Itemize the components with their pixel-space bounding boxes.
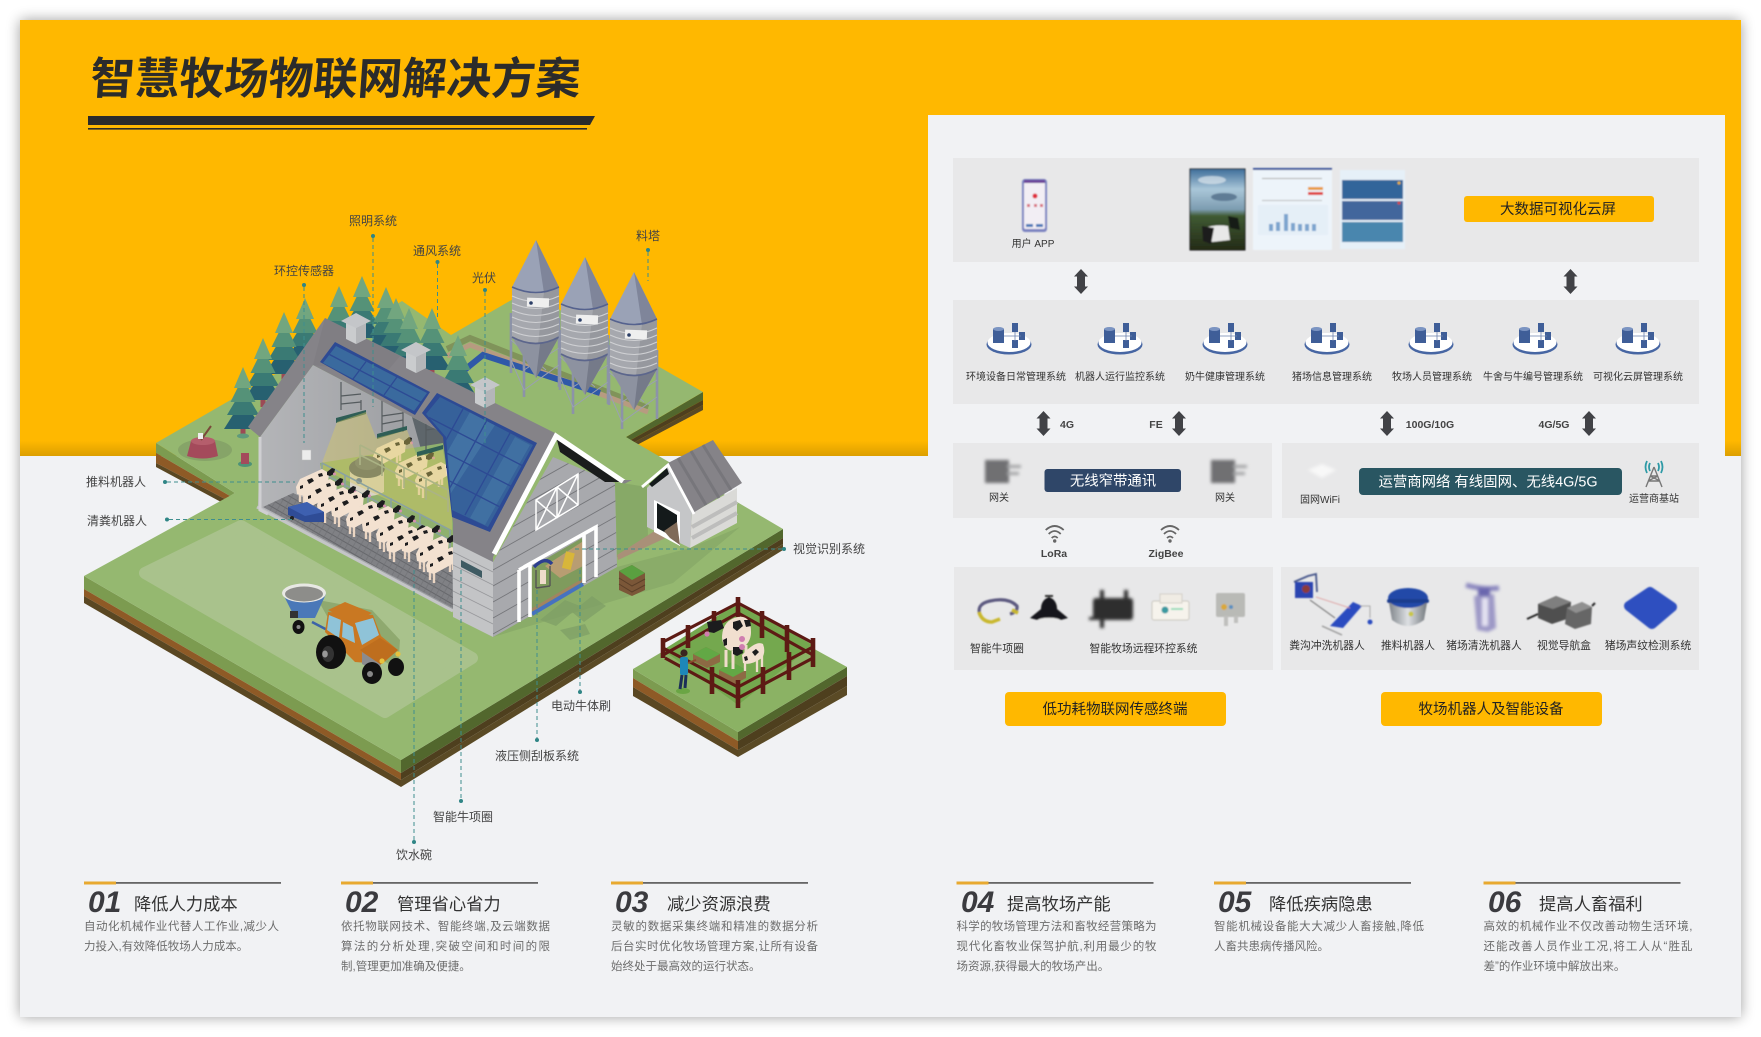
front fence	[663, 638, 813, 708]
loft window	[536, 474, 578, 530]
interior walls	[258, 365, 453, 610]
callout: 电动牛体刷: 电动牛体刷	[551, 698, 611, 713]
shed	[642, 440, 742, 548]
benefit 06: 还能改善人员作业工况,将工人从“胜乱	[1484, 939, 1693, 953]
icon: base station	[1646, 461, 1662, 487]
link: 100G/10G	[1380, 411, 1454, 436]
left wall trim	[260, 437, 268, 514]
label: user app: 用户 APP	[1012, 237, 1055, 250]
light field	[145, 526, 472, 712]
benefit 02: 算法的分析处理,突破空间和时间的限	[341, 939, 550, 953]
house ground shadow	[493, 527, 740, 637]
icon: gateway left	[985, 460, 1021, 483]
ground shadow pattern	[540, 596, 606, 640]
side wall details	[453, 552, 493, 624]
front wall	[493, 457, 617, 637]
roof	[248, 318, 555, 563]
callout: 光伏: 光伏	[472, 271, 496, 285]
benefit 04	[956, 882, 1157, 973]
protocol: LoRa	[1041, 526, 1067, 560]
main ground top	[84, 291, 783, 760]
lamp fixtures	[336, 382, 443, 457]
icon: lamp	[1030, 595, 1068, 622]
callout: 清粪机器人	[87, 514, 292, 528]
benefit 05: 降低疾病隐患	[1269, 894, 1373, 914]
button: big data screen	[1464, 196, 1654, 222]
link: FE: FE	[1149, 419, 1163, 431]
screen: pasture camera	[1190, 169, 1245, 250]
button: big data screen: 大数据可视化云屏	[1500, 201, 1616, 218]
gable trim	[494, 436, 632, 554]
label: vision box: 视觉导航盒	[1537, 638, 1591, 652]
solar panel 2	[422, 393, 537, 532]
feed crates	[693, 647, 746, 685]
farmer	[676, 649, 696, 694]
tree stumps	[178, 426, 252, 467]
callout: 环控传感器	[274, 263, 334, 443]
callout: 料塔: 料塔	[636, 229, 660, 243]
benefit 05: 05	[1218, 886, 1253, 919]
callout: 饮水碗: 饮水碗	[396, 847, 432, 862]
dairy cows	[296, 468, 466, 583]
benefit 06	[1484, 882, 1693, 973]
screen: monitoring	[1340, 170, 1405, 249]
main ground front faces	[84, 529, 783, 787]
cleaning robot	[288, 502, 324, 522]
badge: carrier network	[1359, 468, 1622, 495]
system: barn and cattle ID	[1483, 323, 1583, 383]
benefit 04: 科学的牧场管理方法和畜牧经营策略为	[956, 919, 1156, 933]
benefit 02: 制,管理更加准确及便捷。	[341, 959, 471, 973]
callout: 智能牛项圈	[433, 570, 493, 824]
system: barn and cattle ID: 牛舍与牛编号管理系统	[1483, 370, 1583, 383]
system: dairy health: 奶牛健康管理系统	[1185, 370, 1265, 383]
callout: 清粪机器人: 清粪机器人	[87, 514, 147, 528]
benefit 03: 减少资源浪费	[667, 894, 771, 914]
callout: 饮水碗	[396, 570, 432, 862]
benefit 02: 依托物联网技术、智能终端,及云端数据	[341, 919, 550, 933]
interior grass	[320, 443, 453, 560]
layer: application	[953, 158, 1699, 262]
benefit 02: 管理省心省力	[397, 894, 501, 914]
icon: controller	[1089, 590, 1133, 628]
icon: smart collar	[979, 600, 1018, 622]
callout: 通风系统: 通风系统	[413, 244, 461, 258]
benefit 06: 高效的机械作业不仅改善动物生活环境,	[1484, 919, 1692, 933]
environment sensor	[302, 450, 311, 460]
icon: vision box	[1527, 596, 1595, 629]
benefit 01: 01	[88, 886, 121, 919]
arrow	[1074, 269, 1088, 294]
label: remote env control: 智能牧场远程环控系统	[1090, 641, 1198, 655]
benefit 02	[341, 882, 550, 973]
label: sound detection: 猪场声纹检测系统	[1605, 638, 1691, 652]
system: staff: 牧场人员管理系统	[1392, 370, 1472, 383]
barn	[248, 313, 648, 637]
system: robot monitoring	[1075, 323, 1165, 383]
feed crate	[619, 565, 645, 596]
paddock island	[633, 597, 847, 757]
link: 4G: 4G	[1060, 419, 1074, 431]
icon: cleaning robot	[1466, 585, 1499, 632]
layer: sensor terminals	[954, 567, 1273, 670]
badge: narrowband: 无线窄带通讯	[1070, 472, 1156, 490]
system: environment	[966, 323, 1066, 383]
solar panel 1	[320, 342, 430, 415]
callout: 液压侧刮板系统: 液压侧刮板系统	[495, 748, 579, 763]
calf	[733, 643, 764, 672]
barn door	[519, 527, 596, 622]
callout: 环控传感器: 环控传感器	[274, 263, 334, 278]
ledge side left	[156, 443, 235, 502]
benefit 04: 提高牧场产能	[1007, 894, 1111, 914]
system: cloud screen	[1593, 323, 1683, 383]
button: sensor terminals	[1005, 692, 1226, 726]
benefit 06: 06	[1488, 886, 1522, 919]
button: sensor terminals: 低功耗物联网传感终端	[1042, 701, 1188, 718]
button: robots: 牧场机器人及智能设备	[1418, 701, 1564, 718]
benefit 04: 现代化畜牧业保驾护航,利用最少的牧	[956, 939, 1157, 953]
benefit 04: 场资源,获得最大的牧场产出。	[956, 959, 1109, 973]
callout: 电动牛体刷	[551, 570, 611, 713]
callout: 推料机器人	[86, 475, 295, 489]
layer: management systems	[953, 300, 1699, 404]
floor edge	[257, 507, 453, 611]
callout: 通风系统	[413, 244, 461, 318]
badge: carrier network: 运营商网络 有线固网、无线4G/5G	[1378, 474, 1598, 490]
label: fixed wifi: 固网WiFi	[1300, 494, 1340, 506]
protocol: LoRa: LoRa	[1041, 548, 1067, 560]
callout: 视觉识别系统	[575, 541, 865, 556]
silo platform side	[626, 392, 703, 447]
callout: 液压侧刮板系统	[495, 590, 579, 763]
benefit 05: 人畜共患病传播风险。	[1214, 939, 1329, 953]
panel background	[928, 115, 1725, 460]
label: flushing robot: 粪沟冲洗机器人	[1289, 638, 1365, 652]
benefit 04: 04	[961, 886, 995, 919]
icon: fixed wifi	[1308, 464, 1336, 478]
benefit 03: 始终处于最高效的运行状态。	[611, 959, 760, 973]
link: FE	[1149, 411, 1186, 436]
screen: dashboard	[1253, 168, 1332, 250]
system: farm info: 猪场信息管理系统	[1292, 370, 1372, 383]
back row cows	[373, 437, 455, 498]
benefit 03	[611, 882, 818, 973]
light cones	[320, 412, 452, 530]
icon: gray sensor	[1216, 593, 1245, 626]
benefit 06: 差”的作业环境中解放出来。	[1484, 959, 1625, 973]
callout: 光伏	[472, 271, 496, 446]
system: staff	[1392, 323, 1472, 383]
label: gateway: 网关	[989, 491, 1009, 504]
benefit 01: 力投入,有效降低牧场人力成本。	[84, 939, 248, 953]
front fence	[322, 463, 450, 552]
button: robots	[1381, 692, 1602, 726]
callout: 照明系统	[349, 214, 397, 407]
callout: 智能牛项圈: 智能牛项圈	[433, 809, 493, 824]
icon: user app phone	[1022, 179, 1047, 232]
feed robot	[349, 456, 385, 496]
water channel	[447, 338, 648, 412]
protocol: ZigBee: ZigBee	[1148, 548, 1184, 560]
large cow	[704, 617, 751, 669]
benefit 01: 自动化机械作业代替人工作业,减少人	[84, 919, 280, 933]
callout: 推料机器人: 推料机器人	[86, 475, 146, 489]
benefit 03: 后台实时优化牧场管理方案,让所有设备	[611, 939, 818, 953]
icon: sound detector	[1629, 592, 1672, 624]
yellow header band	[20, 20, 1741, 456]
layer: carrier network	[1282, 443, 1699, 518]
link: 4G/5G	[1539, 411, 1596, 436]
tractor with feed mixer	[282, 584, 404, 684]
benefit 06: 提高人畜福利	[1539, 894, 1643, 914]
callout: 料塔	[636, 229, 660, 281]
label: base station: 运营商基站	[1629, 492, 1679, 505]
trees	[224, 276, 477, 438]
feed silos	[511, 240, 657, 429]
label: pusher robot: 推料机器人	[1381, 638, 1435, 652]
icon: flushing robot	[1294, 574, 1372, 635]
connector wall	[615, 482, 648, 557]
benefit 01: 降低人力成本	[134, 894, 238, 914]
label: cleaning robot: 猪场清洗机器人	[1446, 638, 1522, 652]
back fence	[360, 445, 448, 512]
link: 4G	[1036, 411, 1074, 436]
benefit 02: 02	[345, 886, 379, 919]
roof vents	[341, 313, 500, 408]
layer: narrowband comms	[953, 443, 1272, 518]
system: environment: 环境设备日常管理系统	[966, 370, 1066, 383]
benefit 03: 灵敏的数据采集终端和精准的数据分析	[611, 919, 818, 933]
link: 100G/10G: 100G/10G	[1406, 419, 1454, 431]
grate floor	[263, 493, 453, 608]
benefit 05: 智能机械设备能大大减少人畜接触,降低	[1214, 919, 1424, 933]
label: smart collar: 智能牛项圈	[970, 641, 1024, 655]
benefit 05	[1214, 882, 1424, 953]
badge: narrowband	[1044, 469, 1181, 492]
icon: pusher robot	[1387, 588, 1429, 626]
system: dairy health	[1185, 323, 1265, 383]
siding lines	[493, 463, 617, 634]
benefit 03: 03	[615, 886, 649, 919]
title underline	[88, 116, 595, 130]
system: cloud screen: 可视化云屏管理系统	[1593, 370, 1683, 383]
label: gateway: 网关	[1215, 491, 1235, 504]
layer: robots	[1281, 567, 1699, 670]
protocol: ZigBee	[1148, 526, 1184, 560]
panel lower extension	[928, 456, 1725, 746]
icon: gateway right	[1211, 460, 1247, 483]
icon: white sensor	[1152, 594, 1189, 620]
system: farm info	[1292, 323, 1372, 383]
back fence	[663, 597, 813, 655]
system: robot monitoring: 机器人运行监控系统	[1075, 370, 1165, 383]
callout: 照明系统: 照明系统	[349, 214, 397, 228]
arrow	[1564, 269, 1578, 294]
side wall	[453, 542, 493, 637]
isometric farm illustration	[84, 240, 847, 787]
benefit 01	[84, 882, 281, 953]
rear dark wall	[412, 417, 447, 470]
link: 4G/5G: 4G/5G	[1539, 419, 1569, 431]
ramp	[617, 520, 694, 560]
title: 智慧牧场物联网解决方案	[89, 55, 582, 104]
callout: 视觉识别系统: 视觉识别系统	[793, 541, 865, 556]
panel: architecture	[928, 115, 1725, 746]
